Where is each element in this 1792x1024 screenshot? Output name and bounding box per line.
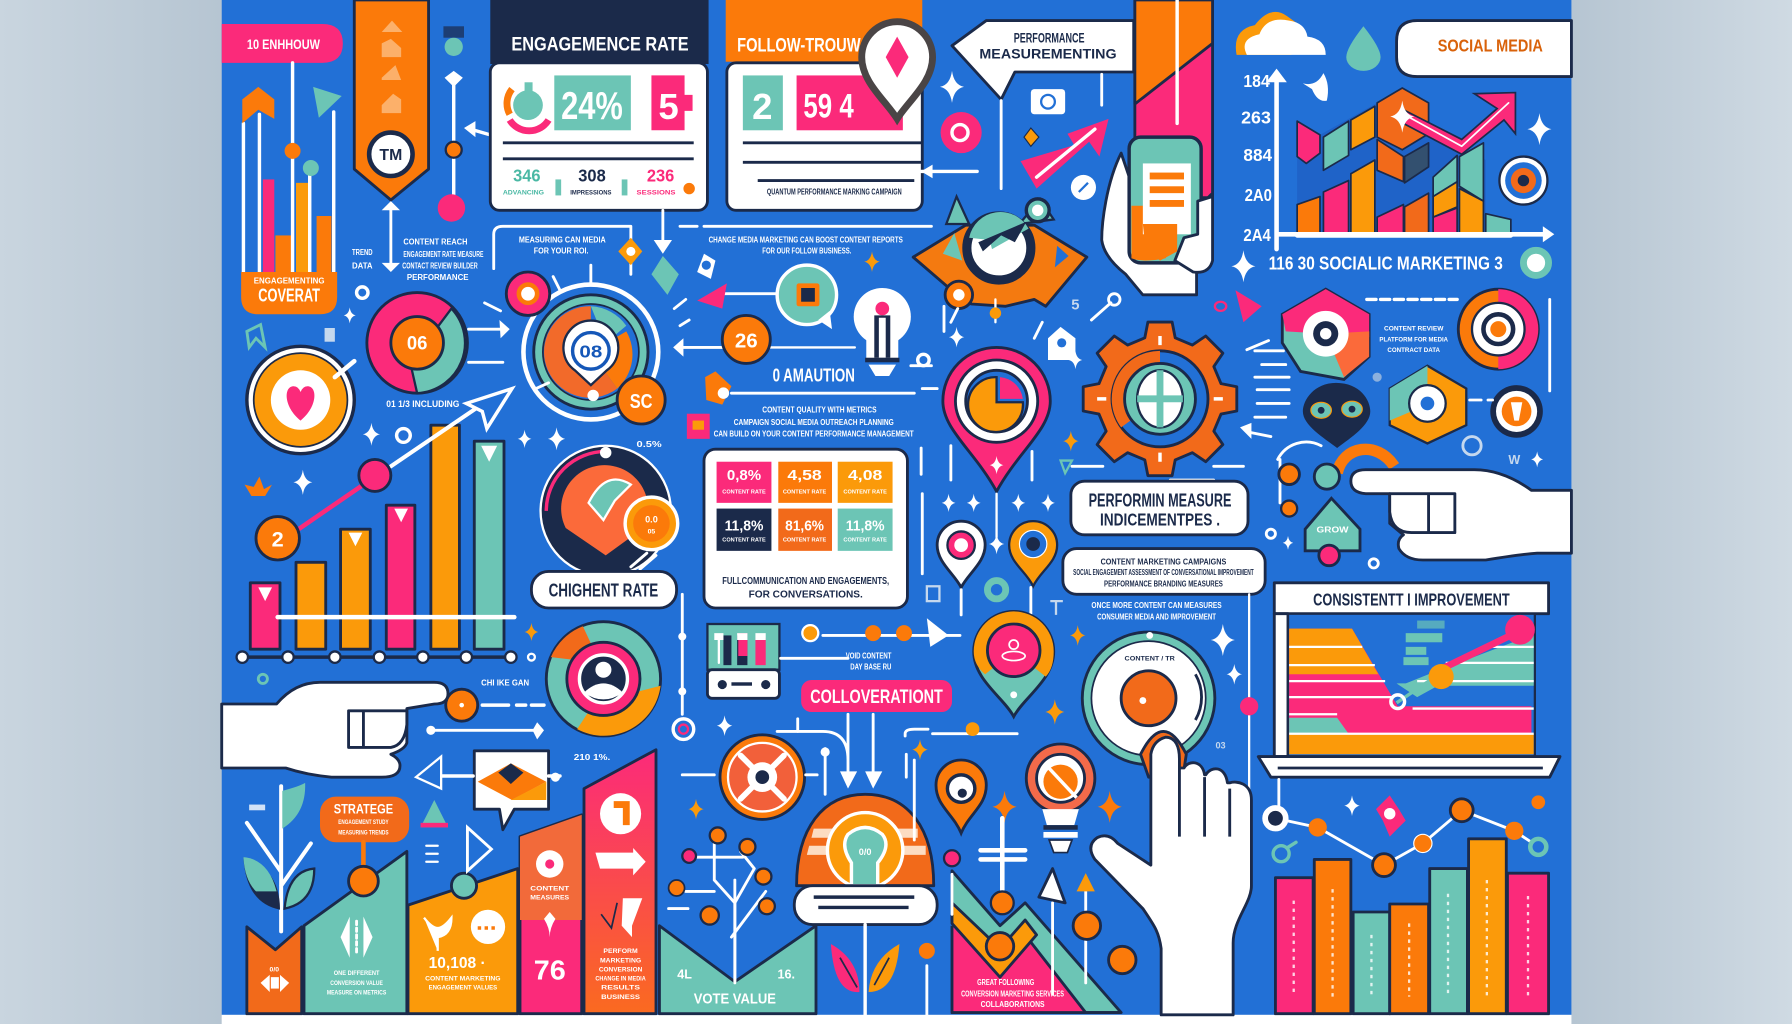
chart: mountain trend: COLLABORATIONS [981,1000,1045,1009]
label: performance measure pill: PERFORMIN MEASURE [1089,489,1231,510]
panel: metric tiles card: CONTENT RATE [843,538,887,544]
heading: analysis text: 0 AMAUTION [773,365,855,386]
chart: pink and teal donut: 06 [407,333,428,355]
panel: follow-through card: 59 4 [803,88,854,126]
panel: tall pink step: BUSINESS [601,994,640,1001]
icons: small pins center [922,494,1063,615]
label: performance measure pill [1071,481,1248,535]
text: notes around upper middle: PERFORMANCE [407,273,469,282]
connector: nodes on stepped panels [349,800,491,898]
chart: mountain trend: CONVERSION MARKETING SERVICES [961,990,1064,999]
panel: metric tiles card: CONTENT RATE [722,538,766,544]
icon: gear light bulb on stand: 0/0 [859,847,871,857]
badge: orange SC [617,376,665,424]
panel: metric tiles card: 11,8% [846,518,885,534]
text: notes around upper middle: CONTACT REVIEW BUILDER [402,262,478,271]
badge: orange 26 [722,315,770,363]
icon: teal orange hexagon [1390,366,1466,443]
callout: performance measurement arrow tag: MEASUREMENTING [979,46,1117,61]
icon: gear light bulb on stand [794,794,937,1015]
icon: envelope speech bubble [416,751,610,830]
text block: white notes pill: PERFORMANCE BRANDING MEASURES [1104,579,1223,588]
panel: engagement rate card: IMPRESSIONS [570,189,612,196]
chart: top left coverage bars [241,63,342,314]
icons: decor under hexagons [1373,373,1543,467]
panel: metric tiles card: CONTENT RATE [783,538,826,544]
heading: social media marketing: 116 30 SOCIALIC MARKETING 3 [1269,253,1503,274]
panel: teal V value: 4L [677,967,692,981]
chart: main target dial [523,285,658,419]
heading: analysis text: CONTENT QUALITY WITH METRICS [762,406,877,415]
text block: white notes pill: CONTENT MARKETING CAMPAIGNS [1101,558,1227,567]
icon: orange gear globe [1083,322,1237,476]
icon: heart circle [247,346,354,454]
text: notes around upper middle: ENGAGEMENT RATE MEASURE [403,250,484,259]
panel: orange pink step: CONTENT [530,885,570,892]
text: notes around upper middle: DATA [352,262,373,271]
callout: strategy bubble: STRATEGE [334,802,393,817]
arrows: lines into target dial [245,265,689,496]
panel: metric tiles card: CONTENT RATE [783,490,826,496]
text block: white note lines [1091,601,1222,621]
text: notes around upper middle: CHANGE MEDIA MARKETING CAN BOOST CONTENT REPORTS [709,235,903,244]
icon: gauge donut [507,82,549,131]
heading: analysis text: CAN BUILD ON YOUR CONTENT PERFORMANCE MANAGEMENT [714,430,914,439]
chart: bottom right bars [1275,839,1549,1014]
panel: engagement rate card: 24% [561,85,623,128]
panel: teal step: ONE DIFFERENT [334,970,380,977]
connector: vertical line with nodes [438,26,490,222]
panel: metric tiles card: 4,08 [848,468,882,484]
panel: tall pink step: MARKETING [600,957,641,964]
label: coverage: ENGAGEMENTING [254,276,325,285]
icon: network nodes with orange handle: GROW [1317,526,1349,535]
connectors: upper middle lines and arrows [382,201,958,357]
icon: teal pin with device [777,265,837,329]
text block: white note lines: CONSUMER MEDIA AND IMPROVEMENT [1097,612,1216,621]
icons: small decor above gear: 5 [1071,298,1080,314]
callout: performance measurement arrow tag: PERFORMANCE [1014,30,1085,45]
icon: dial with hand press: CONTENT / TR [1125,656,1175,663]
icon: envelope speech bubble: 210 1%. [574,753,610,762]
heading: analysis text: CAMPAIGN SOCIAL MEDIA OUTREACH PLANNING [734,418,894,427]
label: engagement rate pill: CHIGHENT RATE [549,580,658,601]
text: notes around upper middle [352,235,903,282]
chart: bottom right line with markers [1265,795,1546,877]
tag: pink heading top left [222,24,343,63]
panel: metric tiles card: 4,58 [787,468,822,484]
panel: amber step: CONTENT MARKETING [425,976,501,983]
panel: metric tiles card [704,449,907,608]
icons: small decor above gear [911,290,1262,537]
panel: engagement rate card: 308 [578,166,606,186]
panel: metric tiles card: CONTENT RATE [722,490,766,496]
label: social media tag [1397,21,1571,77]
panel: orange pink step [520,815,582,1014]
icon: network nodes with orange handle [1266,442,1394,568]
icon: cloud [1236,12,1326,55]
panel: metric tiles card: FOR CONVERSATIONS. [749,590,863,601]
icon: dark mask with eyes [1303,383,1370,448]
icons: small floating icons by arrow tag [921,71,1109,200]
text: hexagon notes: CONTENT REVIEW [1384,325,1444,332]
chart: social media marketing area chart: 184 [1243,71,1270,91]
text: hexagon notes [1367,299,1550,391]
panel: orange notch [247,927,302,1014]
panel: engagement rate card: ENGAGEMENCE RATE [511,33,689,55]
text block: white notes pill [1063,549,1265,594]
panel: follow-through card: QUANTUM PERFORMANCE MARKING CAMPAIGN [767,187,902,196]
icons: small decor near chart [1303,73,1551,205]
icon: hand holding phone [1102,137,1213,295]
chart: social media marketing area chart: 2A0 [1245,185,1272,205]
panel: laptop consistent improvement chart [1258,583,1560,811]
icon: x-ring circle [720,735,805,819]
panel: amber step: ENGAGEMENT VALUES [429,985,498,992]
panel: engagement rate card: SESSIONS [637,189,676,196]
panel: follow-through card: 2 [752,86,772,127]
text: notes around upper middle: FOR YOUR ROI. [534,247,589,256]
chart: dark rate circle [541,446,678,576]
heading: analysis text [687,365,914,439]
panel: teal step: CONVERSION VALUE [330,980,383,987]
chart: dark rate circle: 05 [648,529,655,536]
panel: amber step [408,869,518,1014]
icon: locator pin pie [943,347,1050,491]
icon: pointing hand right [1351,470,1571,560]
chart: ascending bars with arrow: 2 [272,526,284,551]
banner: orange ribbon with TM badge: TM [379,147,402,164]
chart: main target dial: 08 [579,342,602,362]
panel: teal V value: VOTE VALUE [694,991,776,1007]
icon: orange pin face [936,760,986,833]
lines: speed lines right of gear [1240,341,1289,439]
chart: social media marketing area chart: 884 [1243,145,1272,165]
panel: follow-through card [726,0,922,210]
icon: target orange pink [1458,289,1538,369]
icon: network tree [669,799,775,983]
icon: lightbulb with orange lens [1026,744,1095,853]
arrows: lines into target dial: 0.5% [637,440,662,449]
chart: mountain trend [944,850,1136,1013]
label: engagement rate pill [531,571,677,608]
icon: dial with hand press [1082,632,1215,765]
icon: pointing hand left [222,682,448,777]
icon: twin leaves [831,944,899,992]
connector: hand pointer node [426,679,544,739]
banner: orange ribbon with TM badge [354,0,429,200]
text: hexagon notes: CONTRACT DATA [1387,347,1440,354]
label: social media tag: SOCIAL MEDIA [1438,35,1543,55]
icon: plant sprout [243,783,314,931]
text: notes around upper middle: MEASURING CAN MEDIA [519,235,606,244]
icon: pink teal hexagon [1282,289,1369,379]
chart: social media marketing area chart [1241,69,1554,249]
chart: ascending bars with arrow [237,389,517,663]
panel: teal V value: 16. [778,967,795,981]
panel: metric tiles card: FULLCOMMUNICATION AND ENGAGEMENTS, [722,576,889,587]
panel: engagement rate card: 5 [658,86,679,127]
icons: stars and pink node by dial [905,594,1258,800]
panel: orange pink step: 76 [534,954,566,985]
coloured chart facets [1297,88,1511,233]
icon: light bulb [854,288,911,376]
panel: orange notch: 0/0 [270,966,279,973]
icon: teal drop [1346,26,1381,71]
label: small caption under donut: 01 1/3 INCLUDING [386,399,459,409]
tag: pink heading top left: 10 ENHHOUW [247,37,320,52]
badge: orange SC: SC [630,390,653,413]
label: coverage: COVERAT [258,285,320,306]
icon: orange gear eye [913,197,1087,309]
panel: follow-through card: FOLLOW-TROUW [737,34,861,56]
badge: orange 26: 26 [735,329,758,352]
chart: stepped growth panels [247,750,816,1014]
panel: tall pink step: PERFORM [603,948,638,955]
panel: tall pink step: RESULTS [601,985,641,992]
callout: strategy bubble [320,797,409,842]
icons: stars around bulb [912,739,1122,1015]
panel: metric tiles card: 81,6% [785,518,824,534]
callout: strategy bubble: ENGAGEMENT STUDY [338,819,389,826]
panel: engagement rate card: ADVANCING [503,189,544,196]
panel: amber step: 10,108 · [429,955,486,972]
label: performance measure pill: INDICEMENTPES . [1100,510,1220,530]
panel: orange pink step: MEASURES [530,894,570,901]
chart: dark rate circle: 0.0 [645,514,658,524]
label: conversion pink tag: COLLOVERATIONT [810,686,943,708]
panel: tall pink step: CONVERSION [599,966,642,973]
chart: laptop colored area [1289,615,1535,754]
icon: pointing-up white hand [1091,731,1251,1015]
panel: engagement rate card: 346 [513,166,541,186]
chart: social media marketing area chart: 263 [1241,107,1271,127]
panel: teal V value [659,880,816,1014]
icon: location pin top [862,22,933,119]
panel: engagement rate card: 236 [647,166,674,186]
banner: orange and pink ribbon [1135,0,1213,198]
text block: white notes pill: SOCIAL ENGAGEMENT ASSESSMENT OF CONVERSATIONAL IMPROVEMENT [1073,568,1254,577]
panel: laptop consistent improvement chart: CONSISTENTT I IMPROVEMENT [1313,590,1510,610]
panel: metric tiles card: 0,8% [727,468,761,484]
connector: timeline nodes and caption: VOID CONTENT [846,651,892,660]
connector: down arrows to bulb base [682,714,906,794]
text: hexagon notes: PLATFORM FOR MEDIA [1379,337,1448,344]
label: conversion pink tag [801,680,952,712]
panel: metric tiles card: 11,8% [725,518,763,534]
callout: performance measurement arrow tag [952,21,1134,99]
callout: strategy bubble: MEASURING TRENDS [338,829,389,836]
chart: pink and teal donut [367,293,467,393]
connector: timeline nodes and caption [781,618,960,672]
text: notes around upper middle: FOR OUR FOLLOW BUSINESS. [762,247,851,256]
text block: white note lines: ONCE MORE CONTENT CAN MEASURES [1091,601,1222,610]
icon: laptop and small circle lines [258,594,732,739]
connector: timeline nodes and caption: DAY BASE RU [850,663,892,672]
text: notes around upper middle: CONTENT REACH [403,238,468,247]
icon: analytics device [707,624,779,698]
chart: person donut [546,622,661,736]
icons: star and teal ring beside heading [1231,250,1549,282]
panel: teal step: MEASURE ON METRICS [327,989,387,996]
chart: social media marketing area chart: 2A4 [1243,225,1271,245]
panel: metric tiles card: CONTENT RATE [843,490,887,496]
icons: decor under hexagons: W [1508,453,1520,467]
text: notes around upper middle: TREND [352,248,373,257]
panel: engagement rate card [490,0,709,210]
connector: hand pointer node: CHI IKE GAN [481,679,529,688]
icon: dark ring target [1470,385,1543,438]
panel: teal step [304,851,407,1014]
panel: tall pink step: CHANGE IN MEDIA [595,976,646,983]
panel: tall pink step [584,750,656,1014]
icons: stars and pink node by dial: 03 [1215,741,1226,751]
icon: pink orange circle [506,272,550,315]
chart: mountain trend: GREAT FOLLOWING [977,978,1034,987]
icon: teal orange pin with pink center [974,611,1054,717]
label: coverage [241,272,337,314]
